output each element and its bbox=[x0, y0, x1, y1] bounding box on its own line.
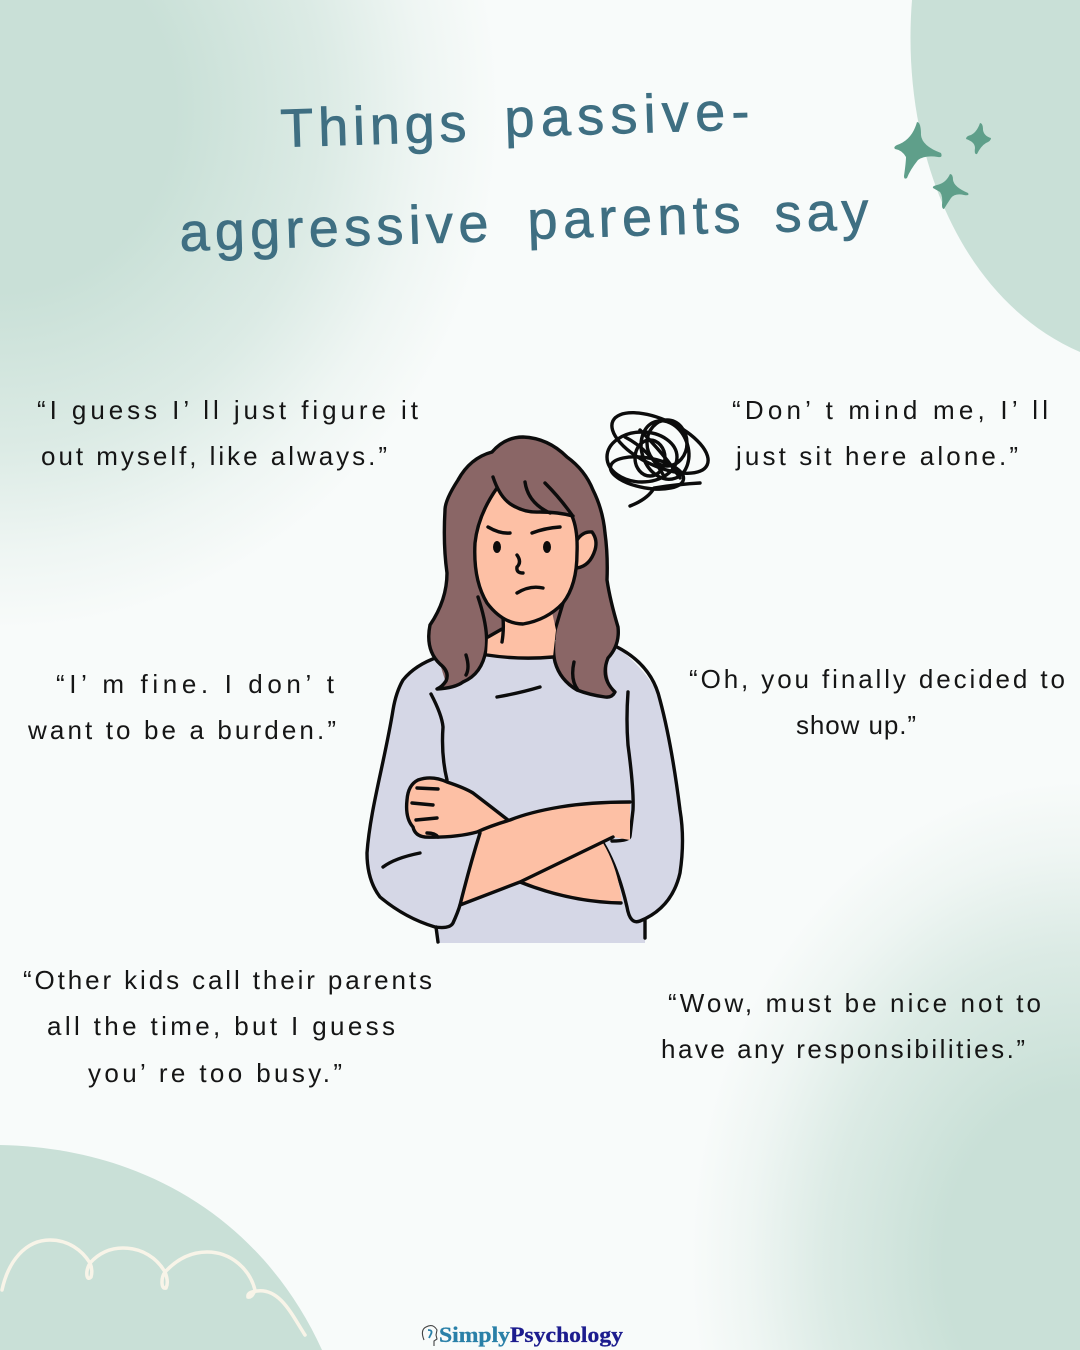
background: soft green blur bottom-right bbox=[660, 760, 1080, 1350]
inner sleeve folds bbox=[383, 687, 633, 867]
ear bbox=[577, 532, 596, 568]
icon: scribble bbox=[603, 400, 717, 506]
quote: figure it out: out myself, like always.” bbox=[41, 441, 387, 471]
icon: sparkles bbox=[894, 122, 991, 209]
illustration: angry woman with crossed arms bbox=[367, 437, 682, 943]
quote: sit here alone: “Don’ t mind me, I’ ll bbox=[732, 395, 1048, 425]
eyes bbox=[493, 541, 501, 553]
lower arm bbox=[520, 837, 622, 903]
quote: sit here alone bbox=[732, 395, 1048, 471]
sweater outline bbox=[367, 647, 682, 942]
title: aggressive bbox=[178, 193, 489, 263]
title: parents bbox=[526, 184, 741, 251]
sweater body bbox=[367, 647, 682, 943]
quote: other kids call: “Other kids call their parents bbox=[23, 965, 432, 995]
quote: other kids call: you’ re too busy.” bbox=[88, 1058, 342, 1088]
quote: not a burden bbox=[27, 669, 336, 745]
face bbox=[475, 488, 577, 624]
cloud outline bottom left bbox=[2, 1240, 305, 1335]
quote: figure it out: “I guess I’ ll just figure it bbox=[37, 395, 419, 425]
title: say bbox=[773, 181, 869, 244]
background: soft green blur top-left bbox=[0, 0, 600, 700]
quote: not a burden: “I’ m fine. I don’ t bbox=[56, 669, 335, 699]
quote: other kids call: all the time, but I guess bbox=[47, 1011, 395, 1041]
quote: sit here alone: just sit here alone.” bbox=[735, 441, 1018, 471]
logo: SimplyPsychology: SimplyPsychology bbox=[439, 1322, 623, 1347]
fringe bbox=[493, 477, 573, 516]
title: Things bbox=[279, 93, 467, 159]
quote: finally decided to show up bbox=[689, 664, 1065, 740]
quote: not a burden: want to be a burden.” bbox=[27, 715, 336, 745]
corner shape: bottom left bbox=[0, 1145, 322, 1350]
quote: no responsibilities: have any responsibilities.” bbox=[661, 1034, 1025, 1064]
title: passive- bbox=[503, 81, 750, 149]
quote: other kids call bbox=[23, 965, 432, 1088]
neck bbox=[487, 612, 556, 658]
quote: finally decided to show up: “Oh, you finally decided to bbox=[689, 664, 1065, 694]
fingers bbox=[412, 788, 438, 837]
quote: no responsibilities: “Wow, must be nice not to bbox=[668, 988, 1041, 1018]
quote: no responsibilities bbox=[661, 988, 1041, 1064]
logo icon bbox=[422, 1326, 437, 1346]
facial features bbox=[488, 527, 560, 593]
quote: finally decided to show up: show up.” bbox=[796, 710, 916, 740]
upper arm and hand bbox=[407, 777, 630, 905]
corner shape: top right bbox=[910, 0, 1080, 352]
quote: figure it out bbox=[37, 395, 419, 471]
hair bbox=[429, 437, 618, 697]
title bbox=[178, 81, 869, 263]
